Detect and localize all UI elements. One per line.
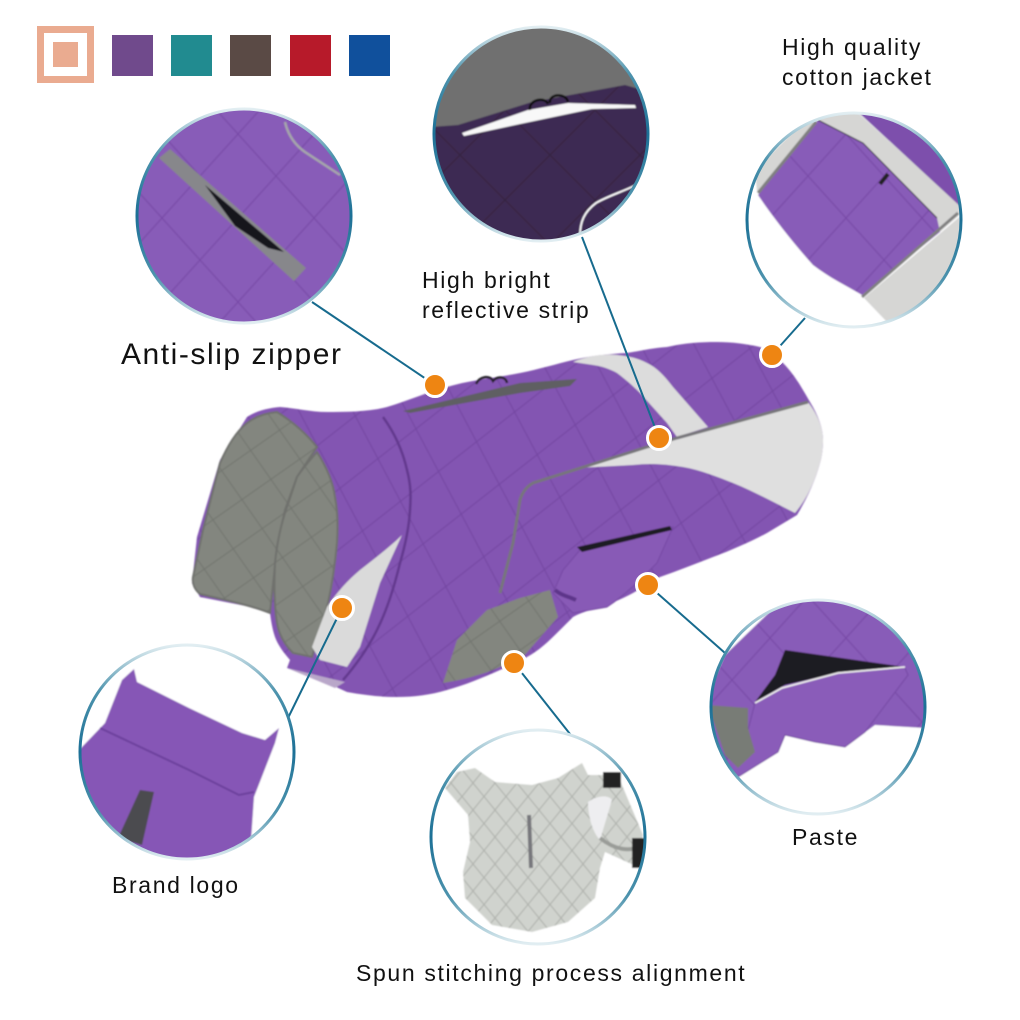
jacket collar strap [287, 668, 345, 688]
jacket illustration [192, 342, 823, 697]
callout circle: paste [705, 595, 935, 820]
jacket collar seam [343, 417, 411, 680]
label: high quality cotton jacket: cotton jacket [782, 64, 933, 90]
marker: reflective strip [648, 426, 670, 450]
jacket collar lining outer lobe [193, 412, 317, 613]
swatch: selected peach [37, 26, 94, 83]
label: high quality cotton jacket: High quality [782, 34, 922, 60]
jacket belly lining [443, 590, 558, 683]
swatch: blue [349, 35, 390, 76]
paste strap on jacket [553, 526, 673, 613]
marker: paste [636, 574, 660, 596]
label: high bright reflective strip: reflective strip [422, 297, 590, 323]
marker: stitching [502, 652, 526, 674]
jacket collar lining inner lobe [274, 452, 338, 657]
jacket reflective seam [500, 402, 808, 593]
label: anti-slip zipper: Anti-slip zipper [121, 338, 343, 371]
callout circle: cotton jacket [745, 110, 965, 330]
callout circle: stitching [430, 730, 650, 950]
marker dots [330, 344, 784, 674]
jacket back light panel [577, 402, 823, 513]
callout circle: anti-slip zipper [130, 105, 360, 330]
label: paste: Paste [792, 824, 859, 850]
swatch: purple [112, 35, 153, 76]
swatch: teal [171, 35, 212, 76]
label: high bright reflective strip: High bright [422, 267, 551, 293]
jacket shoulder light band [573, 355, 708, 437]
marker: cotton jacket [760, 344, 784, 366]
swatch: red [290, 35, 331, 76]
marker: brand logo [330, 596, 354, 620]
jacket purple body [192, 342, 823, 697]
connector lines [288, 237, 805, 734]
callout circle: brand logo [78, 644, 296, 860]
marker: zipper [424, 374, 446, 396]
label: spun stitching process alignment: Spun stitching process alignment [356, 960, 746, 986]
colour swatches [37, 26, 390, 83]
jacket collar light side panel [312, 535, 402, 667]
swatch: brown [230, 35, 271, 76]
label: brand logo: Brand logo [112, 872, 240, 898]
anti-slip zipper on jacket [403, 377, 577, 413]
callout circle: reflective strip [432, 26, 650, 242]
